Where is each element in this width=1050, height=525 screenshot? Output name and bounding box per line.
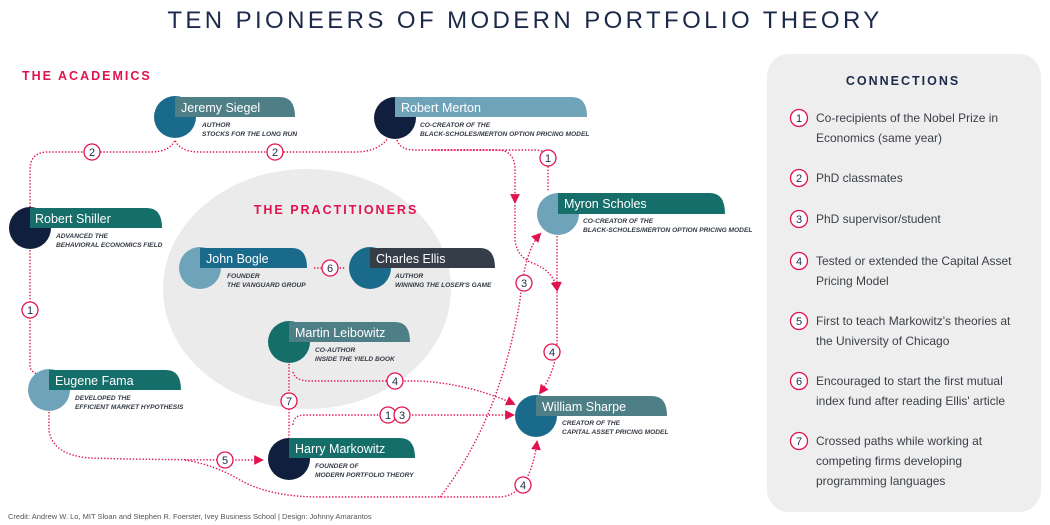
node: Harry Markowitz: MODERN PORTFOLIO THEORY <box>315 472 414 479</box>
legend items: Tested or extended the Capital Asset <box>816 254 1012 268</box>
node: Harry Markowitz: Harry Markowitz <box>295 442 385 456</box>
connection labels on lines: 4 <box>392 376 398 388</box>
legend items: Economics (same year) <box>816 131 942 145</box>
panel: connections <box>767 54 1041 512</box>
legend items: 3 <box>796 214 802 226</box>
legend items: 1 <box>796 113 802 125</box>
node: Robert Merton: Robert Merton <box>401 101 481 115</box>
node: Jeremy Siegel: Jeremy Siegel <box>181 101 260 115</box>
legend items: 2 <box>796 173 802 185</box>
connection labels on lines: 1 <box>545 153 551 165</box>
practitioners ellipse <box>163 169 451 409</box>
node: Robert Shiller: Robert Shiller <box>35 212 111 226</box>
connection labels on lines: 7 <box>286 396 292 408</box>
connection labels on lines: 1 <box>385 410 391 422</box>
connection labels on lines: 4 <box>549 347 555 359</box>
node: Charles Ellis: AUTHOR <box>394 273 423 280</box>
legend items: PhD supervisor/student <box>816 212 941 226</box>
connections heading: CONNECTIONS <box>846 74 960 88</box>
connection labels on lines: 3 <box>399 410 405 422</box>
legend items: Co-recipients of the Nobel Prize in <box>816 111 998 125</box>
node: Jeremy Siegel <box>154 96 297 138</box>
legend items: PhD classmates <box>816 171 903 185</box>
node: Robert Shiller: BEHAVIORAL ECONOMICS FIELD <box>56 242 163 249</box>
legend items: Crossed paths while working at <box>816 434 983 448</box>
node: Harry Markowitz: FOUNDER OF <box>315 463 360 470</box>
node: Eugene Fama: EFFICIENT MARKET HYPOTHESIS <box>75 404 184 411</box>
node: Robert Shiller: ADVANCED THE <box>55 233 108 240</box>
node: Jeremy Siegel: STOCKS FOR THE LONG RUN <box>202 131 297 138</box>
credit: Credit: Andrew W. Lo, MIT Sloan and Stephen R. Foerster, Ivey Business School | Design: Johnny Amarantos <box>8 512 372 521</box>
legend items: 7 <box>796 436 802 448</box>
connection labels on lines: 5 <box>222 455 228 467</box>
node: Eugene Fama: DEVELOPED THE <box>75 395 131 402</box>
node: Charles Ellis: Charles Ellis <box>376 252 445 266</box>
node: Eugene Fama <box>28 369 184 411</box>
legend items: First to teach Markowitz's theories at <box>816 314 1011 328</box>
legend items: 6 <box>796 376 802 388</box>
connection labels on lines <box>22 144 560 493</box>
node: Charles Ellis: WINNING THE LOSER'S GAME <box>395 282 492 289</box>
title: TEN PIONEERS OF MODERN PORTFOLIO THEORY <box>167 7 883 34</box>
legend items: 5 <box>796 316 802 328</box>
connection labels on lines: 2 <box>272 147 278 159</box>
connection labels on lines: 1 <box>27 305 33 317</box>
connection labels on lines: 2 <box>89 147 95 159</box>
connection labels on lines: 6 <box>327 263 333 275</box>
node: John Bogle: THE VANGUARD GROUP <box>227 282 306 289</box>
node: Harry Markowitz <box>268 438 415 480</box>
legend items <box>790 110 1012 488</box>
node: William Sharpe: CREATOR OF THE <box>562 420 621 427</box>
legend items: programming languages <box>816 474 945 488</box>
node: Martin Leibowitz: Martin Leibowitz <box>295 326 385 340</box>
node: Myron Scholes: Myron Scholes <box>564 197 647 211</box>
node: Myron Scholes: BLACK-SCHOLES/MERTON OPTION PRICING MODEL <box>583 227 752 234</box>
legend items: competing firms developing <box>816 454 962 468</box>
node: Charles Ellis <box>349 247 495 289</box>
heading: the academics: THE ACADEMICS <box>22 69 152 83</box>
node: John Bogle: John Bogle <box>206 252 269 266</box>
heading: the practitioners: THE PRACTITIONERS <box>254 203 418 217</box>
node: Robert Merton: BLACK-SCHOLES/MERTON OPTION PRICING MODEL <box>420 131 589 138</box>
connector lines <box>30 138 557 497</box>
node: John Bogle <box>179 247 307 289</box>
node: Myron Scholes <box>537 193 752 235</box>
node: William Sharpe: CAPITAL ASSET PRICING MODEL <box>562 429 668 436</box>
node: Robert Merton: CO-CREATOR OF THE <box>420 122 491 129</box>
node: Eugene Fama: Eugene Fama <box>55 374 134 388</box>
node: Robert Shiller <box>9 207 163 249</box>
legend items: Encouraged to start the first mutual <box>816 374 1003 388</box>
node: Martin Leibowitz: CO-AUTHOR <box>315 347 356 354</box>
connection labels on lines: 4 <box>520 480 526 492</box>
node: William Sharpe <box>515 395 668 437</box>
node: William Sharpe: William Sharpe <box>542 400 626 414</box>
node: Martin Leibowitz <box>268 321 410 363</box>
legend items: index fund after reading Ellis' article <box>816 394 1005 408</box>
legend items: the University of Chicago <box>816 334 950 348</box>
node: Jeremy Siegel: AUTHOR <box>201 122 230 129</box>
connection labels on lines: 3 <box>521 278 527 290</box>
node: John Bogle: FOUNDER <box>227 273 260 280</box>
node: Myron Scholes: CO-CREATOR OF THE <box>583 218 654 225</box>
node: Martin Leibowitz: INSIDE THE YIELD BOOK <box>315 356 396 363</box>
node: Robert Merton <box>374 97 589 139</box>
legend items: Pricing Model <box>816 274 889 288</box>
legend items: 4 <box>796 256 802 268</box>
